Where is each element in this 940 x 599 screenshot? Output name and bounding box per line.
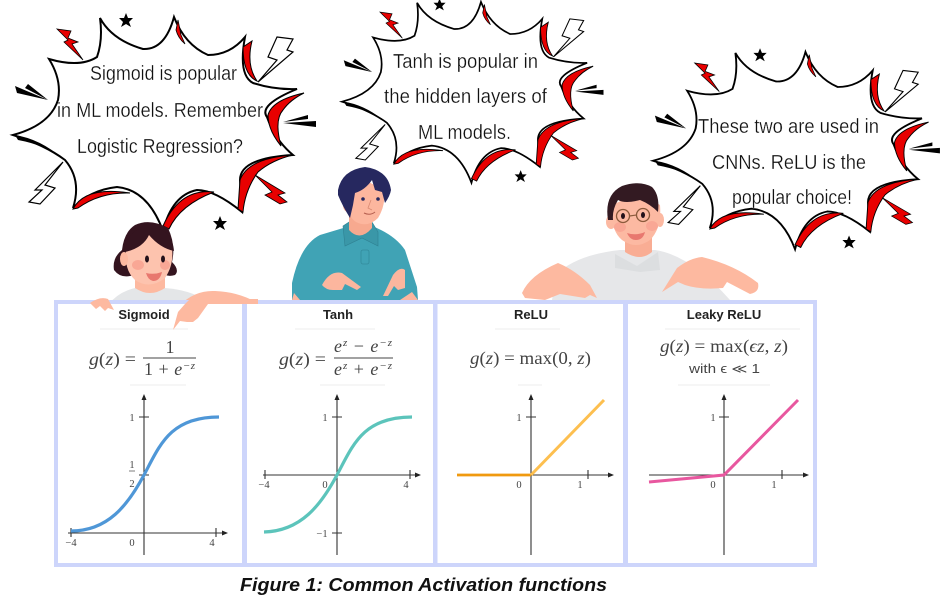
tanh formula: −z — [379, 337, 393, 349]
leaky relu title: Leaky ReLU — [687, 307, 761, 322]
leaky relu formula: g(z) = max(ϵz, z) — [660, 336, 788, 357]
tanh formula: e — [370, 359, 378, 379]
panel: tanh — [258, 307, 421, 555]
relu chart: 1 — [516, 413, 522, 424]
tanh formula: e — [334, 359, 342, 379]
panel: relu — [457, 307, 614, 555]
leaky relu chart — [649, 394, 809, 555]
tanh formula: e — [334, 336, 342, 356]
sigmoid chart: 0 — [129, 538, 135, 549]
sigmoid burst text — [57, 63, 263, 158]
sigmoid chart: 2 — [129, 479, 135, 490]
relu chart: 1 — [577, 480, 583, 491]
leaky relu chart: 0 — [710, 480, 716, 491]
caption: Figure 1: Common Activation functions — [240, 574, 607, 595]
sigmoid burst text: Sigmoid is popular — [90, 63, 237, 85]
leaky relu chart: 1 — [771, 480, 777, 491]
relu burst text: CNNs. ReLU is the — [712, 152, 866, 174]
sigmoid title: Sigmoid — [118, 307, 170, 322]
sigmoid chart: 1 — [129, 460, 135, 471]
tanh chart: −1 — [316, 529, 328, 540]
panel: leaky relu — [649, 307, 809, 555]
speech burst: relu — [653, 48, 940, 249]
relu title: ReLU — [514, 307, 548, 322]
relu burst text — [698, 116, 879, 209]
sigmoid chart — [65, 394, 228, 555]
sigmoid formula: g(z) = — [89, 349, 136, 370]
sigmoid burst text: Logistic Regression? — [77, 136, 243, 158]
tanh burst text: ML models. — [418, 122, 511, 144]
sigmoid chart: 4 — [209, 538, 215, 549]
sigmoid chart: −4 — [65, 538, 77, 549]
tanh title: Tanh — [323, 307, 353, 322]
relu chart — [457, 394, 614, 555]
sigmoid chart: 1 — [129, 413, 135, 424]
tanh formula: + — [348, 359, 369, 379]
leaky relu formula — [660, 336, 788, 376]
sigmoid burst text: in ML models. Remember — [57, 100, 263, 122]
tanh burst text: the hidden layers of — [384, 86, 547, 108]
person: woman — [108, 222, 259, 305]
tanh chart: 4 — [403, 480, 409, 491]
person: man with glasses — [522, 183, 758, 300]
relu burst text: These two are used in — [698, 116, 879, 138]
tanh chart: 1 — [322, 413, 328, 424]
tanh burst text — [384, 51, 547, 144]
person: man in teal shirt — [292, 167, 418, 300]
tanh formula: e — [370, 336, 378, 356]
tanh formula — [279, 336, 393, 379]
panel: sigmoid — [65, 307, 228, 555]
leaky relu formula: with ϵ ≪ 1 — [688, 362, 760, 376]
relu chart: 0 — [516, 480, 522, 491]
speech burst: tanh — [342, 0, 604, 183]
leaky relu chart: 1 — [710, 413, 716, 424]
tanh formula: g(z) = — [279, 349, 326, 370]
tanh formula: z — [342, 360, 348, 372]
sigmoid formula: 1 — [166, 337, 174, 357]
tanh chart: −4 — [258, 480, 270, 491]
relu burst text: popular choice! — [732, 187, 852, 209]
tanh chart — [258, 394, 421, 555]
sigmoid formula: 1 + e — [144, 359, 182, 379]
tanh burst text: Tanh is popular in — [393, 51, 538, 73]
speech burst: sigmoid — [13, 13, 316, 231]
tanh formula: − — [348, 336, 369, 356]
tanh formula: −z — [379, 360, 393, 372]
woman's hands over frame — [90, 298, 258, 330]
tanh formula: z — [342, 337, 348, 349]
relu formula: g(z) = max(0, z) — [470, 348, 591, 369]
sigmoid formula — [89, 337, 196, 379]
tanh chart: 0 — [322, 480, 328, 491]
chart frame — [56, 302, 815, 565]
sigmoid formula: −z — [183, 360, 196, 372]
